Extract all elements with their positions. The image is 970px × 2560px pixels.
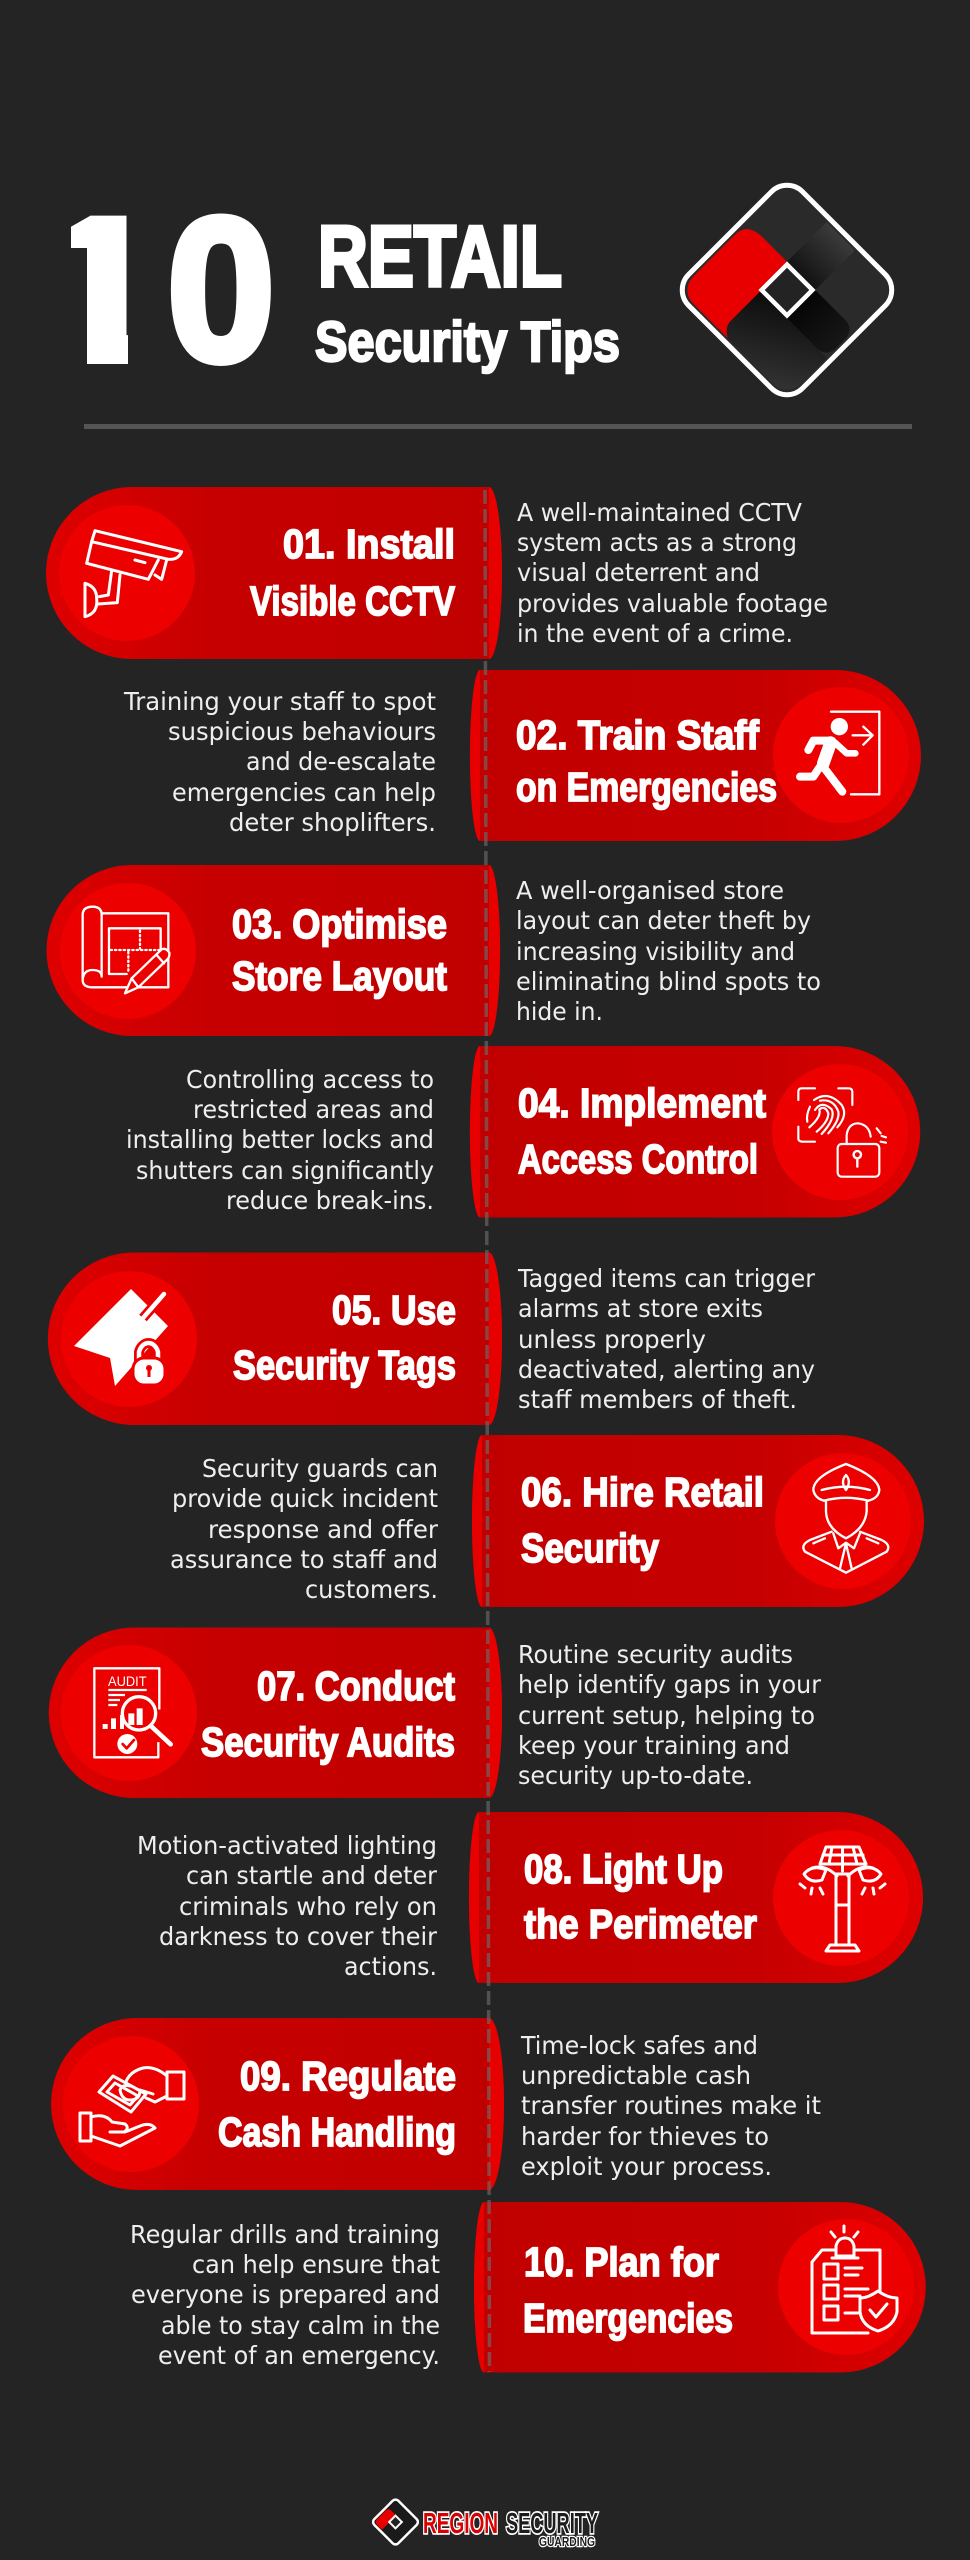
title: 03: Store Layout: [232, 953, 447, 999]
description: 02: [123, 687, 436, 837]
description: 07: security up-to-date.: [518, 1761, 753, 1790]
icon: solar street lamp: [773, 1830, 909, 1966]
title: 10: Emergencies: [523, 2295, 733, 2341]
description: 06: response and offer: [208, 1515, 439, 1544]
title: 09: 09. Regulate: [240, 2053, 456, 2099]
description: 09: transfer routines make it: [521, 2091, 821, 2120]
description: 01: [517, 498, 828, 648]
description: 06: provide quick incident: [172, 1484, 438, 1513]
title: 06: [521, 1469, 764, 1571]
panel: tip 03: [47, 865, 821, 1036]
title: 08: 08. Light Up: [524, 1846, 723, 1892]
description: 08: Motion-activated lighting: [137, 1831, 437, 1860]
description: 05: [517, 1264, 816, 1414]
description: 03: [516, 876, 821, 1026]
description: 05: alarms at store exits: [518, 1294, 763, 1323]
description: 09: Time-lock safes and: [520, 2031, 758, 2060]
pill: tip 06: [472, 1435, 924, 1607]
title: 02: on Emergencies: [516, 764, 777, 810]
icon: fingerprint and lock: [772, 1064, 908, 1200]
description: 07: keep your training and: [518, 1731, 790, 1760]
icon: emergency exit: [773, 687, 909, 823]
description: 10: able to stay calm in the: [161, 2311, 440, 2340]
pill: tip 03: [47, 865, 500, 1036]
description: 10: event of an emergency.: [158, 2341, 440, 2370]
description: 06: assurance to staff and: [170, 1545, 438, 1574]
footer logo: [371, 2498, 598, 2549]
title: 07: 07. Conduct: [257, 1663, 455, 1709]
description: 03: increasing visibility and: [516, 937, 795, 966]
description: 02: emergencies can help: [172, 778, 436, 807]
description: 02: Training your staff to spot: [123, 687, 436, 716]
description: 04: shutters can significantly: [136, 1156, 434, 1185]
description: 09: unpredictable cash: [521, 2061, 751, 2090]
description: 09: harder for thieves to: [521, 2122, 769, 2151]
logo: diamond mark: [680, 182, 894, 398]
title: 04: [518, 1080, 766, 1182]
description: 10: Regular drills and training: [130, 2220, 440, 2249]
icon: audit report: [61, 1645, 197, 1781]
icon: cctv camera: [59, 505, 195, 641]
description: 01: visual deterrent and: [517, 558, 760, 587]
title: 02: [516, 712, 777, 810]
description: 04: [126, 1065, 434, 1215]
title: 06: Security: [521, 1525, 659, 1571]
icon: floor plan and pencil: [60, 883, 196, 1019]
description: 08: darkness to cover their: [159, 1922, 438, 1951]
description: 05: deactivated, alerting any: [518, 1355, 815, 1384]
description: 06: customers.: [305, 1575, 438, 1604]
pill: tip 10: [474, 2202, 926, 2372]
description: 01: A well-maintained CCTV: [517, 498, 802, 527]
pill: tip 07: [49, 1628, 502, 1798]
description: 05: Tagged items can trigger: [517, 1264, 816, 1293]
description: 07: help identify gaps in your: [518, 1670, 822, 1699]
wordmark: REGION: REGION: [423, 2508, 498, 2540]
description: 06: [170, 1454, 439, 1604]
divider: [84, 424, 912, 429]
description: 07: current setup, helping to: [518, 1701, 815, 1730]
description: 07: [518, 1640, 822, 1790]
big number 1: 1: [36, 176, 165, 404]
pill: tip 09: [51, 2018, 504, 2190]
title: 02: 02. Train Staff: [516, 712, 759, 758]
heading: Security Tips: Security Tips: [315, 310, 620, 374]
description: 10: [130, 2220, 440, 2370]
description: 05: unless properly: [518, 1325, 706, 1354]
icon: security tag and lock: [61, 1271, 197, 1407]
icon: emergency checklist: [778, 2219, 914, 2355]
title: [71, 214, 619, 374]
title: 08: [524, 1846, 757, 1947]
footer mark: [371, 2498, 420, 2546]
description: 03: eliminating blind spots to: [516, 967, 821, 996]
title: 05: 05. Use: [332, 1287, 456, 1333]
description: 02: and de-escalate: [246, 747, 436, 776]
title: 04: 04. Implement: [518, 1080, 766, 1126]
description: 08: actions.: [344, 1952, 437, 1981]
pill: tip 02: [470, 670, 921, 841]
description: 07: Routine security audits: [518, 1640, 793, 1669]
description: 08: can startle and deter: [186, 1861, 438, 1890]
description: 02: deter shoplifters.: [229, 808, 436, 837]
description: 04: Controlling access to: [186, 1065, 434, 1094]
description: 08: criminals who rely on: [179, 1892, 437, 1921]
title: 10: [523, 2239, 733, 2341]
panel: tip 07: [49, 1628, 822, 1798]
title: 09: [218, 2053, 456, 2155]
description: 04: reduce break-ins.: [226, 1186, 434, 1215]
title: 01: [250, 521, 456, 624]
icon: audit report: AUDIT: [108, 1673, 147, 1689]
description: 06: Security guards can: [202, 1454, 438, 1483]
big number 0: 0: [167, 176, 275, 404]
title: 03: [232, 901, 447, 999]
panel: tip 01: [46, 487, 828, 659]
description: 01: in the event of a crime.: [517, 619, 793, 648]
title: 05: [233, 1287, 456, 1388]
description: 03: layout can deter theft by: [516, 906, 811, 935]
panel: tip 08: [137, 1812, 923, 1983]
panel: tip 06: [170, 1435, 924, 1607]
pill: tip 01: [46, 487, 502, 659]
description: 03: hide in.: [516, 997, 603, 1026]
title: 10: 10. Plan for: [524, 2239, 719, 2285]
title: 07: [201, 1663, 455, 1765]
icon: security guard: [775, 1453, 911, 1589]
pill: tip 08: [469, 1812, 923, 1983]
description: 09: [520, 2031, 821, 2181]
title: 03: 03. Optimise: [232, 901, 447, 947]
wordmark: GUARDING: GUARDING: [539, 2534, 595, 2549]
panel: tip 04: [126, 1046, 920, 1218]
description: 01: provides valuable footage: [517, 589, 828, 618]
description: 08: [137, 1831, 438, 1981]
title: 01: 01. Install: [283, 521, 455, 567]
pill: tip 04: [470, 1046, 920, 1218]
panel: tip 09: [51, 2018, 821, 2190]
panel: tip 10: [130, 2202, 926, 2372]
description: 04: restricted areas and: [193, 1095, 434, 1124]
title: 01: Visible CCTV: [250, 578, 456, 624]
wordmark: SECURITY: SECURITY: [506, 2508, 598, 2540]
panel: tip 05: [48, 1252, 816, 1425]
title: 09: Cash Handling: [218, 2109, 456, 2155]
description: 04: installing better locks and: [126, 1125, 434, 1154]
pill: tip 05: [48, 1252, 502, 1425]
title: 07: Security Audits: [201, 1719, 455, 1765]
panel: tip 02: [123, 670, 921, 841]
title: 06: 06. Hire Retail: [521, 1469, 764, 1515]
heading: RETAIL: RETAIL: [318, 209, 562, 305]
description: 01: system acts as a strong: [517, 528, 797, 557]
description: 10: everyone is prepared and: [131, 2280, 440, 2309]
description: 02: suspicious behaviours: [168, 717, 436, 746]
description: 09: exploit your process.: [521, 2152, 772, 2181]
title: 04: Access Control: [518, 1136, 758, 1182]
icon: cash handover: [63, 2036, 199, 2172]
description: 03: A well-organised store: [516, 876, 784, 905]
description: 10: can help ensure that: [192, 2250, 440, 2279]
description: 05: staff members of theft.: [518, 1385, 797, 1414]
title: 08: the Perimeter: [524, 1901, 757, 1947]
title: 05: Security Tags: [233, 1342, 456, 1388]
